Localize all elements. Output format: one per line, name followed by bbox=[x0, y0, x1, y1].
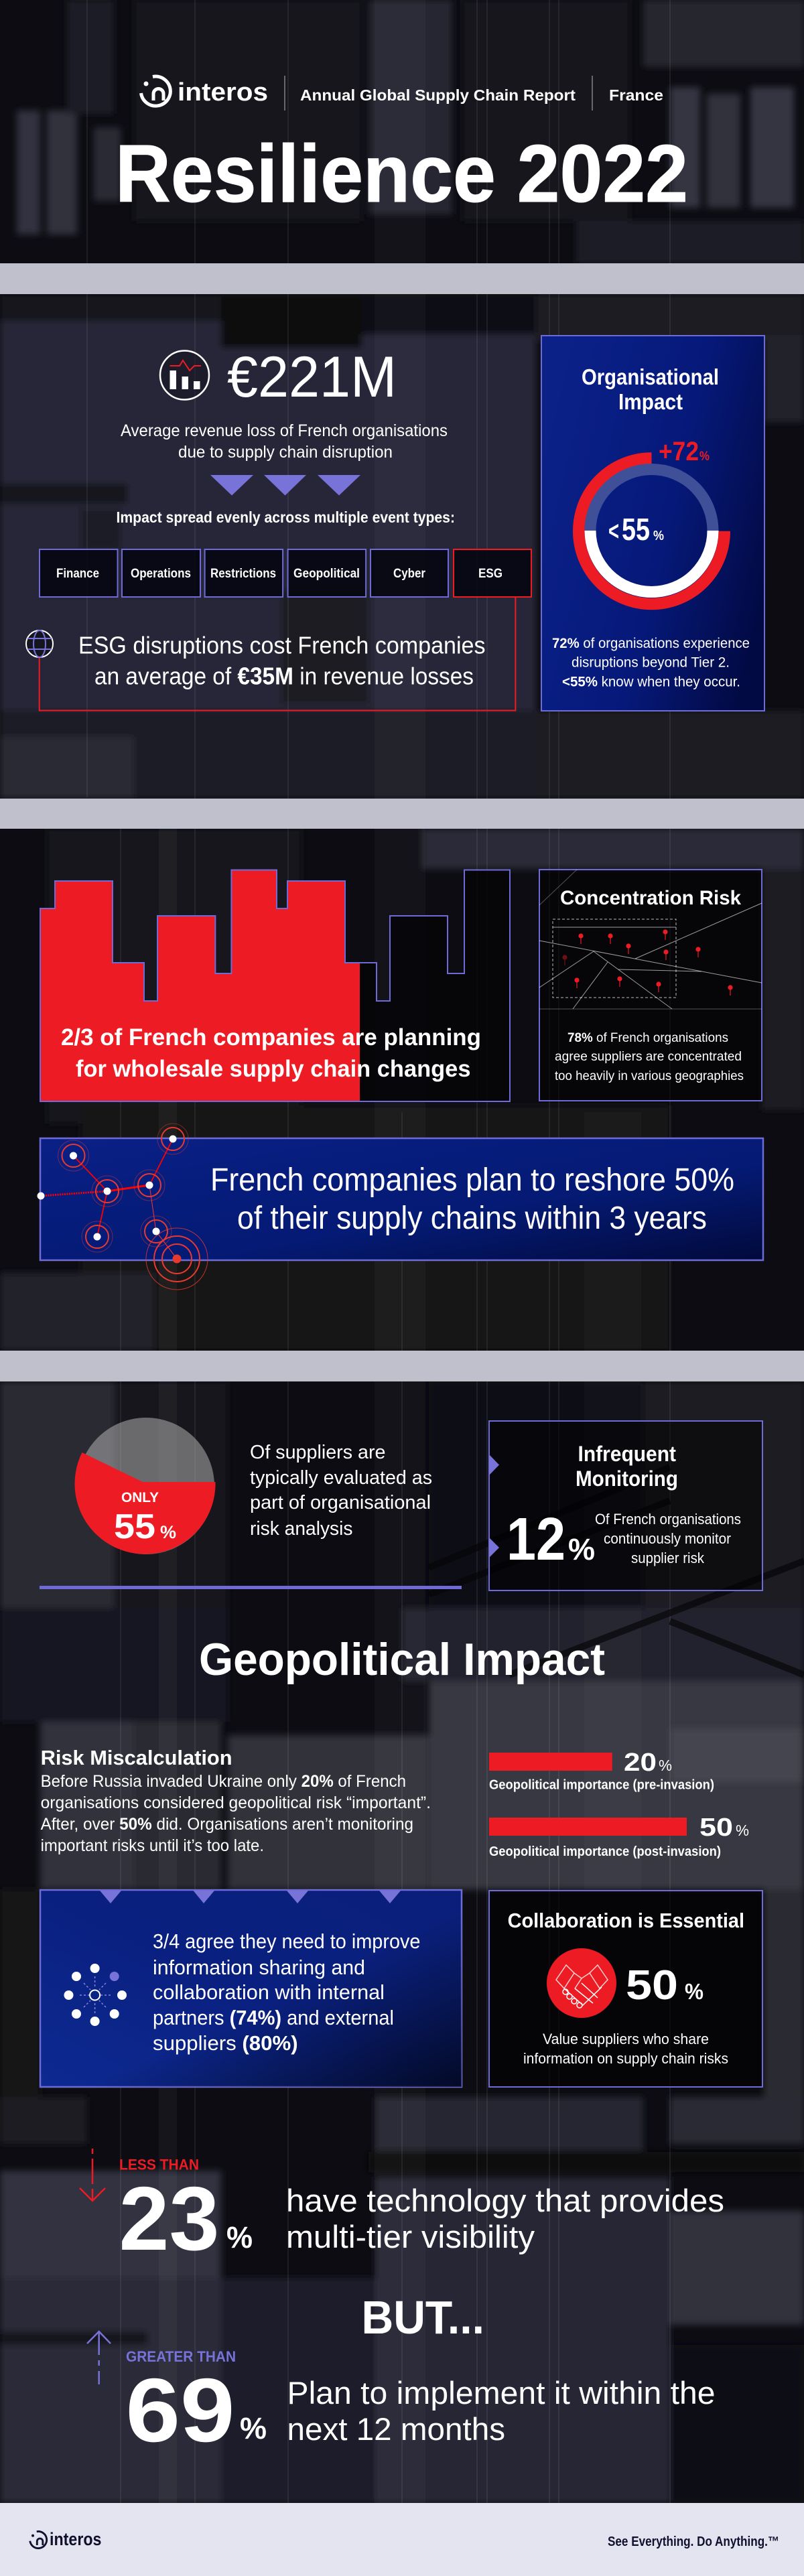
bar: post-invasion: 50 bbox=[699, 1814, 733, 1842]
stat: +72%: % bbox=[699, 450, 710, 464]
text: but: BUT... bbox=[362, 2291, 484, 2344]
text: value suppliers: information on supply chain risks bbox=[523, 2050, 728, 2067]
text: information sharing: partners (74%) and external bbox=[153, 2006, 394, 2029]
stat block: greater than 69%: % bbox=[240, 2411, 267, 2445]
panel: reshore banner bbox=[38, 1124, 763, 1290]
text: information sharing: information sharing and bbox=[153, 1956, 365, 1979]
pie chart: only 55%: 55 bbox=[114, 1507, 155, 1546]
stat block: less than 23%: 23 bbox=[119, 2168, 220, 2269]
stat: 50%: 50 bbox=[626, 1962, 678, 2009]
text: concentration risk: too heavily in various geographies bbox=[555, 1069, 744, 1083]
text: concentration risk bbox=[555, 1030, 744, 1083]
bar: pre-invasion: 20 bbox=[624, 1749, 657, 1777]
panel title bbox=[576, 1442, 678, 1491]
stat: +72%: +72 bbox=[659, 437, 699, 466]
text: wholesale changes bbox=[61, 1024, 481, 1082]
text: value suppliers bbox=[523, 2031, 728, 2067]
panel: information sharing bbox=[40, 1890, 462, 2087]
bar: pre-invasion: Geopolitical importance (pre-invasion) bbox=[489, 1778, 714, 1793]
event type boxes bbox=[40, 549, 531, 710]
stat block: less than 23%: LESS THAN bbox=[119, 2156, 199, 2173]
bar: post-invasion: % bbox=[736, 1822, 749, 1839]
text: concentration risk: 78% of French organisations bbox=[567, 1030, 728, 1045]
panel: organisational impact bbox=[541, 336, 764, 711]
text: ESG cost: an average of €35M in revenue losses bbox=[94, 662, 474, 690]
text: suppliers evaluated: typically evaluated as bbox=[250, 1467, 432, 1489]
text block: risk miscalculation: Risk Miscalculation bbox=[41, 1746, 232, 1769]
panel title bbox=[582, 364, 719, 414]
stat block: greater than 69%: next 12 months bbox=[287, 2411, 505, 2447]
divider band 2 bbox=[0, 799, 804, 829]
stat block: less than 23%: multi-tier visibility bbox=[286, 2219, 535, 2254]
panel title: Impact bbox=[618, 389, 683, 414]
subheading: event types: Impact spread evenly across multiple event types: bbox=[117, 509, 455, 526]
event type boxes: Geopolitical bbox=[293, 567, 360, 581]
text block: risk miscalculation: After, over 50% did. Organisations aren’t monitoring bbox=[41, 1815, 413, 1834]
logo: interos: interos bbox=[178, 78, 268, 107]
event type boxes: Restrictions bbox=[210, 567, 276, 581]
text: organisational impact: <55% know when they occur. bbox=[562, 675, 740, 690]
stat: under 55% bbox=[608, 512, 664, 547]
text block: risk miscalculation: Before Russia invaded Ukraine only 20% of French bbox=[41, 1772, 406, 1791]
text: reshore: of their supply chains within 3 years bbox=[237, 1201, 707, 1236]
panel title: Infrequent bbox=[578, 1442, 676, 1466]
stat: under 55%: % bbox=[653, 529, 664, 543]
markers: top triangles bbox=[100, 1891, 401, 1903]
tagline: See Everything. Do Anything.™ bbox=[608, 2534, 779, 2549]
text: continuous monitoring: continuously monitor bbox=[604, 1530, 731, 1547]
bar: post-invasion: Geopolitical importance (post-invasion) bbox=[489, 1844, 721, 1859]
text: suppliers evaluated: part of organisational bbox=[250, 1492, 431, 1513]
text: information sharing bbox=[153, 1929, 421, 2055]
text: wholesale changes: 2/3 of French companies are planning bbox=[61, 1024, 481, 1050]
panel title: Collaboration is Essential bbox=[508, 1909, 744, 1932]
text: information sharing: collaboration with internal bbox=[153, 1980, 385, 2004]
text: suppliers evaluated: Of suppliers are bbox=[250, 1442, 386, 1463]
divider band 3 bbox=[0, 1351, 804, 1381]
markers: side triangles bbox=[489, 1454, 499, 1558]
footer logo: interos bbox=[50, 2529, 102, 2549]
text: average revenue loss bbox=[121, 421, 448, 462]
bar chart: geopolitical importance bbox=[489, 1749, 749, 1859]
text: information sharing: suppliers (80%) bbox=[153, 2031, 298, 2055]
section: revenue loss bbox=[26, 345, 531, 710]
panel title: Concentration Risk bbox=[560, 887, 741, 909]
text: ESG cost bbox=[78, 632, 485, 690]
divider band 1 bbox=[0, 263, 804, 294]
stat: 12%: % bbox=[568, 1532, 595, 1566]
footer bbox=[0, 2503, 804, 2576]
text: reshore bbox=[210, 1162, 734, 1236]
text: average revenue loss: Average revenue loss of French organisations bbox=[121, 421, 448, 440]
icon: globe bbox=[26, 630, 53, 657]
arrows: three down triangles bbox=[210, 475, 360, 496]
stat block: less than 23%: have technology that provides bbox=[286, 2183, 724, 2218]
stat block: greater than 69%: 69 bbox=[126, 2360, 234, 2461]
bar: post-invasion bbox=[489, 1814, 749, 1859]
text: average revenue loss: due to supply chain disruption bbox=[178, 443, 393, 462]
text: suppliers evaluated: risk analysis bbox=[250, 1518, 352, 1540]
text: wholesale changes: for wholesale supply chain changes bbox=[76, 1056, 470, 1082]
stat: 50%: % bbox=[685, 1979, 704, 2004]
panel title: Organisational bbox=[582, 364, 719, 389]
text: continuous monitoring bbox=[595, 1511, 741, 1566]
event type boxes: ESG bbox=[478, 567, 503, 581]
pie chart: only 55%: ONLY bbox=[121, 1490, 159, 1505]
panel: collaboration is essential bbox=[489, 1891, 762, 2087]
panel: wholesale changes skyline bbox=[40, 870, 510, 1101]
logo: interos bbox=[141, 76, 268, 107]
text: organisational impact: 72% of organisations experience bbox=[552, 636, 750, 651]
text: continuous monitoring: Of French organisations bbox=[595, 1511, 741, 1528]
event type boxes: Cyber bbox=[393, 567, 426, 581]
bar: pre-invasion: % bbox=[659, 1757, 672, 1774]
arrow: up bbox=[87, 2331, 111, 2384]
panel title: Monitoring bbox=[576, 1467, 678, 1491]
pie chart: only 55%: % bbox=[160, 1522, 176, 1542]
stat: under 55%: < bbox=[608, 517, 619, 546]
text: organisational impact: disruptions beyond Tier 2. bbox=[572, 655, 730, 670]
map of supplier pins bbox=[539, 870, 762, 1009]
icon: revenue chart bbox=[160, 351, 209, 399]
donut chart bbox=[579, 458, 724, 604]
stat: 12%: 12 bbox=[507, 1506, 565, 1573]
text: organisational impact bbox=[552, 636, 750, 690]
text block: risk miscalculation: organisations considered geopolitical risk “important”. bbox=[41, 1793, 431, 1812]
text: ESG cost: ESG disruptions cost French companies bbox=[78, 632, 485, 659]
report name: Annual Global Supply Chain Report bbox=[300, 86, 576, 104]
stat: 50% bbox=[626, 1962, 704, 2009]
bar: pre-invasion bbox=[489, 1749, 714, 1793]
text: information sharing: 3/4 agree they need to improve bbox=[153, 1929, 421, 1953]
panel: concentration risk bbox=[539, 870, 762, 1101]
panel: infrequent monitoring bbox=[489, 1421, 762, 1590]
text: continuous monitoring: supplier risk bbox=[631, 1550, 705, 1566]
icon: handshake bbox=[547, 1948, 616, 2018]
event type boxes: Operations bbox=[131, 567, 191, 581]
pie chart: only 55% bbox=[75, 1418, 216, 1554]
text: reshore: French companies plan to reshore 50% bbox=[210, 1162, 734, 1198]
section: supplier evaluation bbox=[40, 1418, 462, 1589]
stat block: less than 23% bbox=[80, 2149, 724, 2269]
header bbox=[141, 76, 663, 111]
text block: risk miscalculation bbox=[41, 1746, 431, 1855]
stat: under 55%: 55 bbox=[622, 512, 650, 547]
heading: geopolitical impact: Geopolitical Impact bbox=[199, 1634, 605, 1685]
ESG connector line bbox=[40, 597, 515, 710]
text: value suppliers: Value suppliers who share bbox=[543, 2031, 709, 2047]
stat block: greater than 69% bbox=[87, 2331, 716, 2461]
network diagram bbox=[38, 1124, 208, 1290]
text: concentration risk: agree suppliers are concentrated bbox=[555, 1049, 742, 1064]
arrow: down bbox=[80, 2149, 105, 2201]
text: suppliers evaluated bbox=[250, 1442, 432, 1540]
stat block: greater than 69%: GREATER THAN bbox=[126, 2348, 236, 2365]
footer logo bbox=[30, 2529, 102, 2549]
stat: 221M: €221M bbox=[227, 345, 397, 409]
event type boxes: Finance bbox=[56, 567, 99, 581]
text block: risk miscalculation: important risks until it’s too late. bbox=[41, 1836, 264, 1855]
stat block: less than 23%: % bbox=[226, 2220, 253, 2254]
stat block: greater than 69%: Plan to implement it within the bbox=[287, 2375, 716, 2411]
title: Resilience 2022 bbox=[115, 128, 688, 219]
country: France bbox=[609, 86, 663, 104]
icon: collaboration dots bbox=[64, 1964, 127, 2026]
